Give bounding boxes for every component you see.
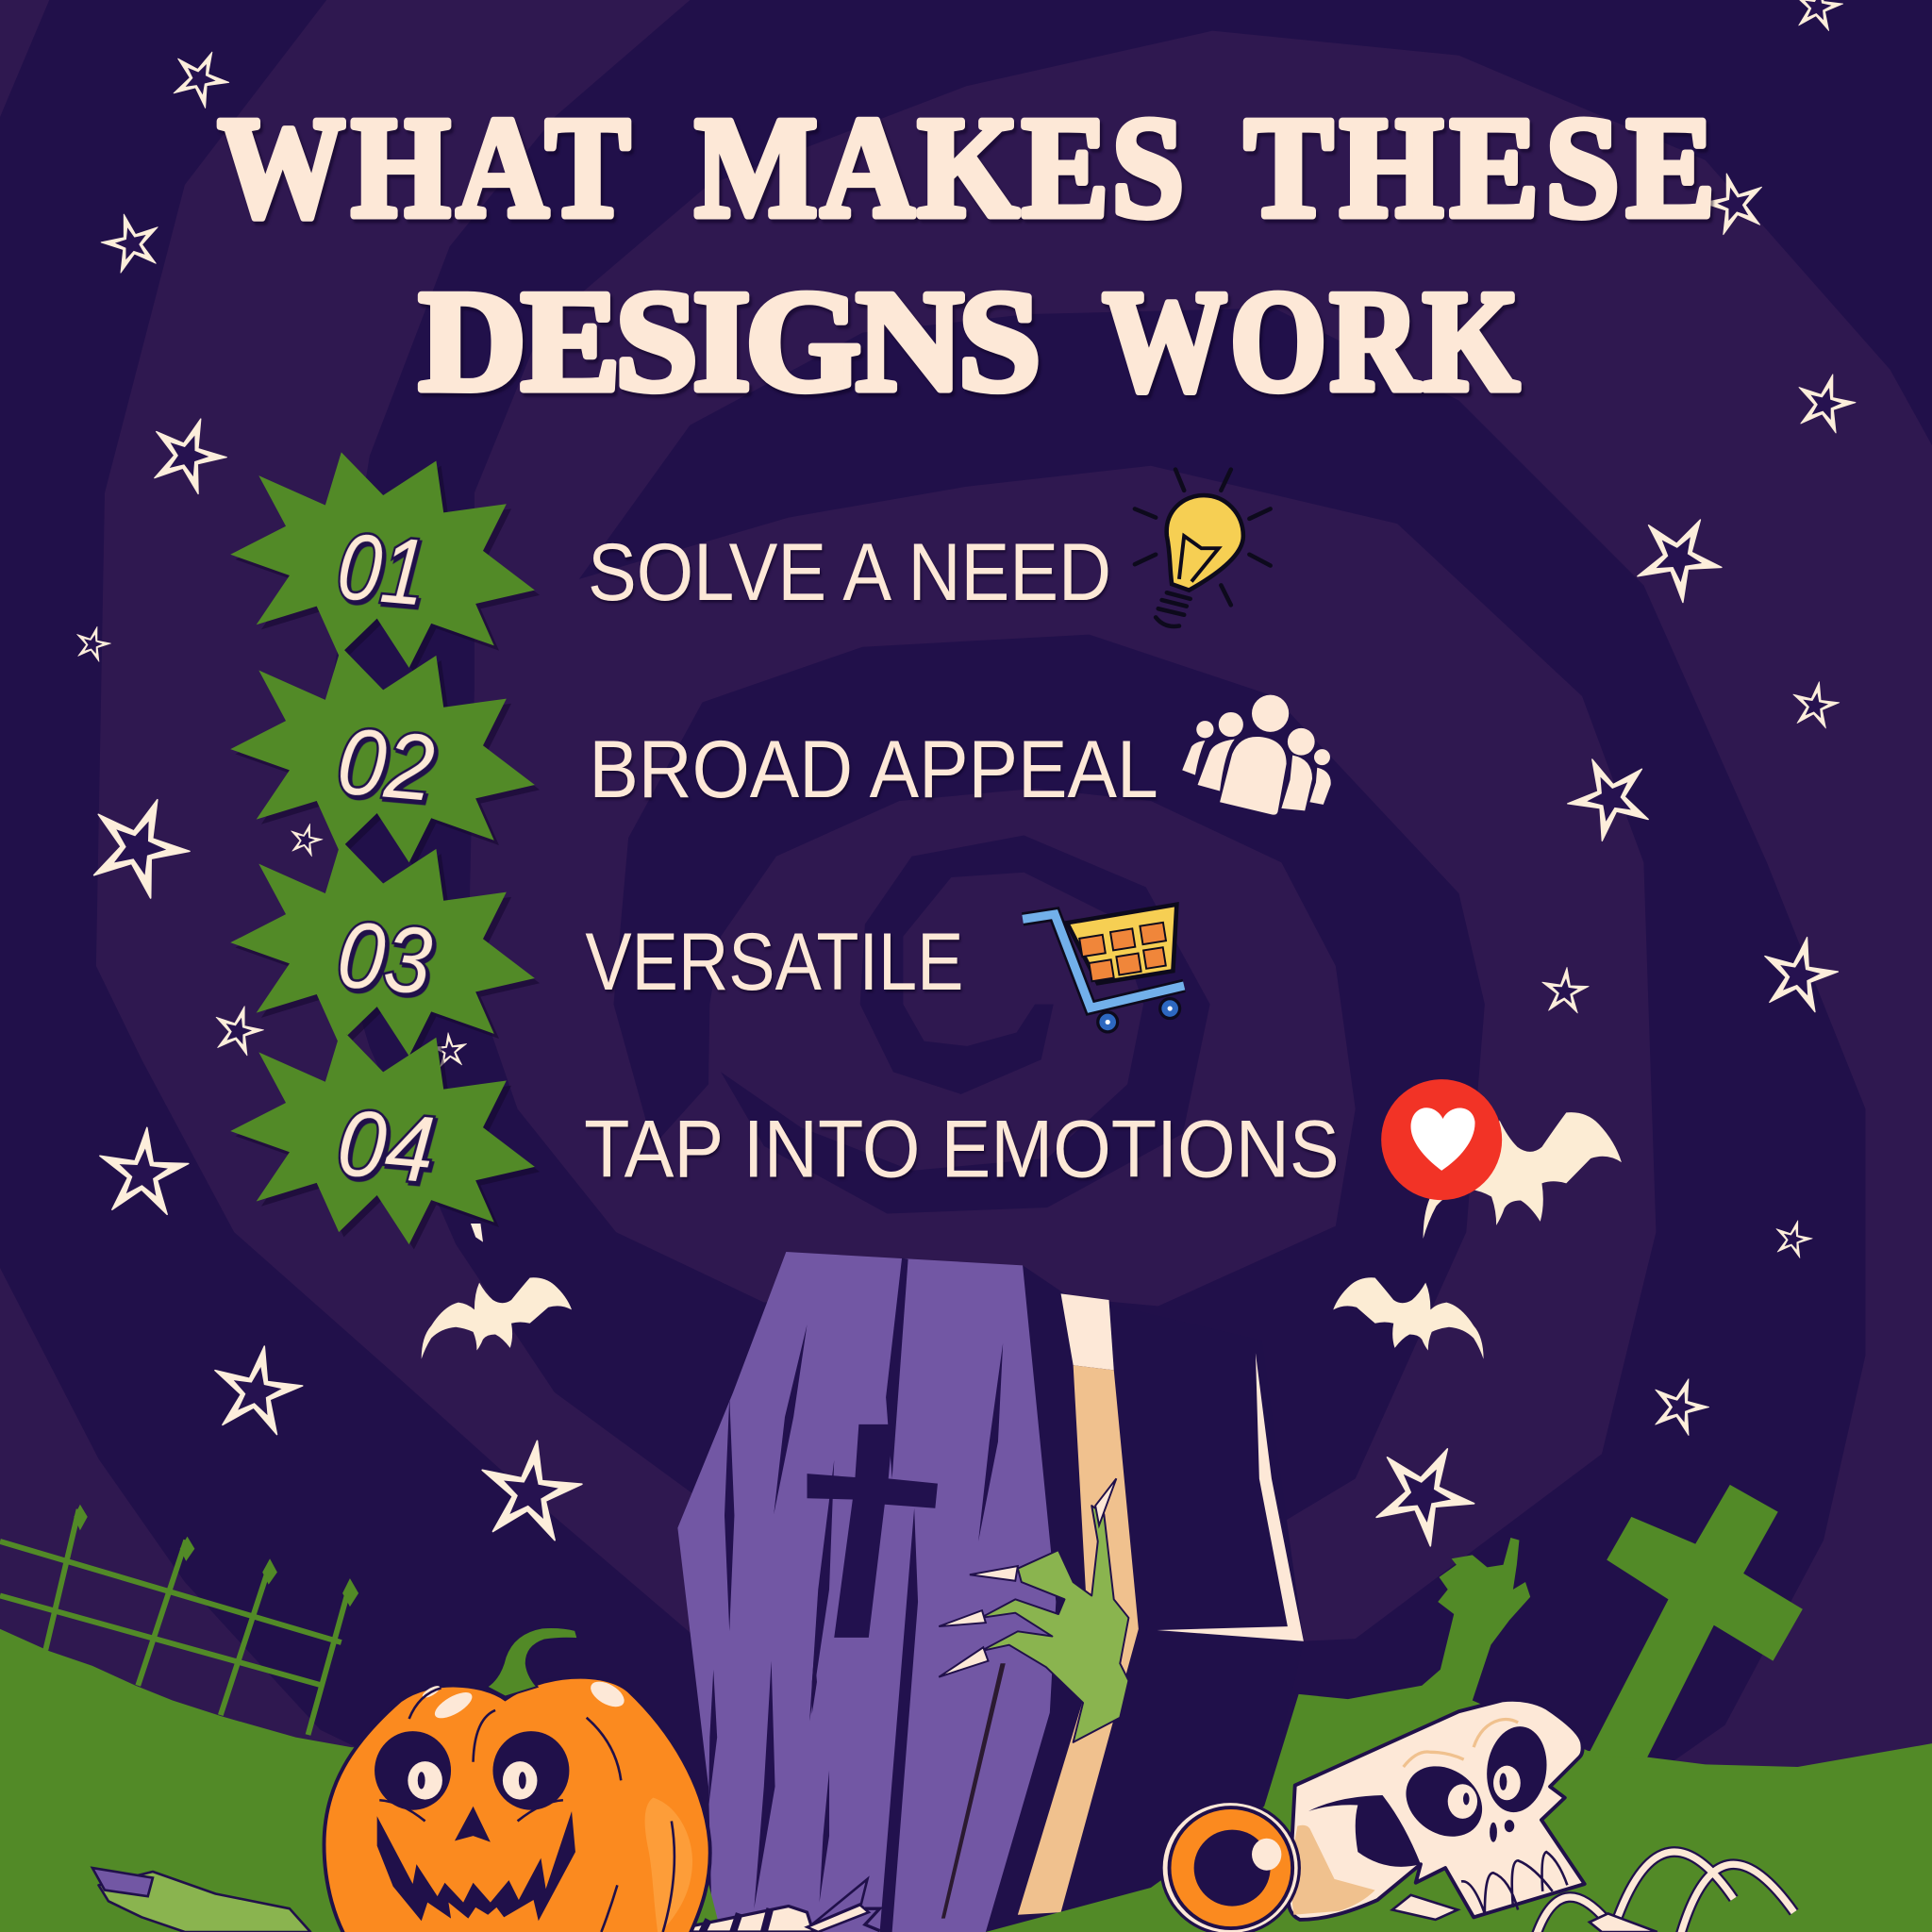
title: THESE	[1244, 87, 1715, 247]
item 1: burst badge and label	[230, 452, 1111, 673]
pumpkin	[325, 1627, 710, 1932]
item 2: burst badge and label: 02	[333, 708, 439, 822]
right bat	[1333, 1277, 1484, 1359]
title: MAKES	[695, 88, 1184, 247]
coffin lid	[677, 1252, 1056, 1932]
stars	[72, 0, 1861, 1555]
item 2: burst badge and label: BROAD APPEAL	[589, 724, 1158, 815]
title: DESIGNS	[419, 261, 1041, 421]
open coffin interior	[961, 1265, 1304, 1932]
item 1: burst badge and label: 01	[333, 514, 429, 625]
severed finger	[92, 1868, 310, 1932]
icon: heart badge	[1381, 1079, 1502, 1200]
coffin side strip	[1018, 1293, 1139, 1915]
title	[218, 87, 1715, 421]
item 4: burst badge and label: 04	[333, 1091, 439, 1204]
fence	[0, 1505, 358, 1735]
icon: group of people	[1182, 695, 1331, 815]
coffin inner edge line	[1157, 1353, 1304, 1641]
bat behind heart	[1424, 1112, 1622, 1239]
zombie hand on coffin	[939, 1478, 1128, 1742]
item 4: burst badge and label: TAP INTO EMOTIONS	[584, 1104, 1340, 1194]
gravestone cross	[1589, 1485, 1803, 1759]
item 2: burst badge and label	[230, 647, 1158, 868]
left bat	[422, 1277, 572, 1359]
item 3: burst badge and label	[230, 841, 963, 1061]
icon: shopping cart	[1023, 905, 1184, 1032]
eyeball	[1161, 1802, 1299, 1932]
item 3: burst badge and label: VERSATILE	[585, 917, 963, 1008]
title: WHAT	[218, 89, 630, 248]
icon: lightbulb	[1135, 470, 1271, 626]
item 3: burst badge and label: 03	[333, 902, 436, 1014]
title: WORK	[1103, 261, 1519, 421]
item 1: burst badge and label: SOLVE A NEED	[588, 527, 1111, 618]
skeleton arm bones	[663, 1879, 880, 1932]
left ground	[0, 1629, 721, 1932]
item 4: burst badge and label	[230, 1029, 1340, 1249]
ribs	[1537, 1852, 1794, 1932]
skull	[1289, 1700, 1585, 1920]
right ground with zombie hand	[986, 1538, 1932, 1932]
